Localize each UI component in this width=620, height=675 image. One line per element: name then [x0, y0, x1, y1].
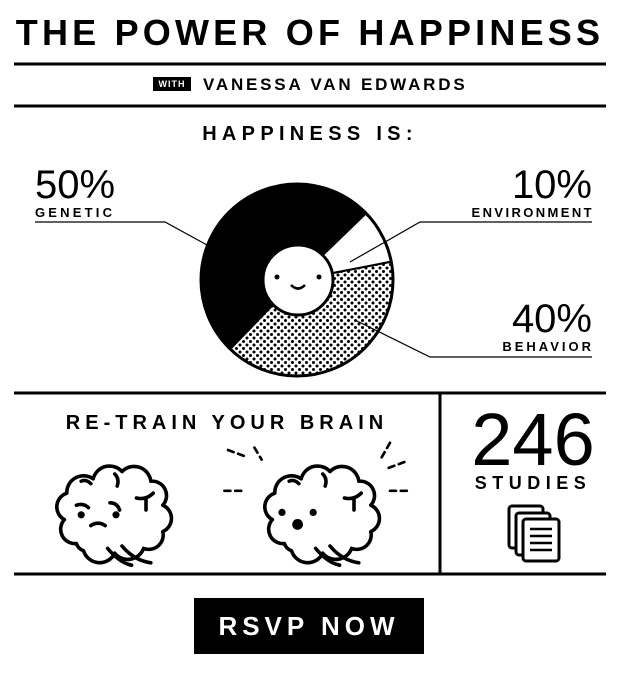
stat: 246 studies: 246 [471, 398, 595, 481]
label: 40% behavior [502, 297, 594, 354]
byline [153, 75, 467, 94]
button: rsvp now: RSVP NOW [218, 611, 400, 641]
label: 10% environment: 10% [512, 163, 592, 207]
label: 40% behavior: 40% [512, 297, 592, 341]
icon: smiley face [263, 245, 333, 315]
label: 40% behavior: BEHAVIOR [502, 339, 594, 354]
label: 50% genetic: 50% [35, 163, 115, 207]
icon: sad brain [57, 466, 171, 565]
heading: re-train your brain: RE-TRAIN YOUR BRAIN [66, 412, 388, 434]
label: 10% environment: ENVIRONMENT [472, 205, 594, 220]
label: 50% genetic: GENETIC [35, 205, 115, 220]
leader lines [35, 222, 592, 357]
button: rsvp now [194, 598, 424, 654]
icon: documents [509, 506, 559, 561]
subheading: HAPPINESS IS: [202, 123, 418, 145]
label: 10% environment [472, 163, 594, 220]
author name: VANESSA VAN EDWARDS [203, 75, 467, 94]
with badge [153, 77, 191, 91]
stat: 246 studies: STUDIES [475, 473, 591, 493]
title: THE POWER OF HAPPINESS [16, 12, 604, 53]
with badge: WITH [158, 79, 186, 89]
icon: happy brain [224, 443, 407, 565]
